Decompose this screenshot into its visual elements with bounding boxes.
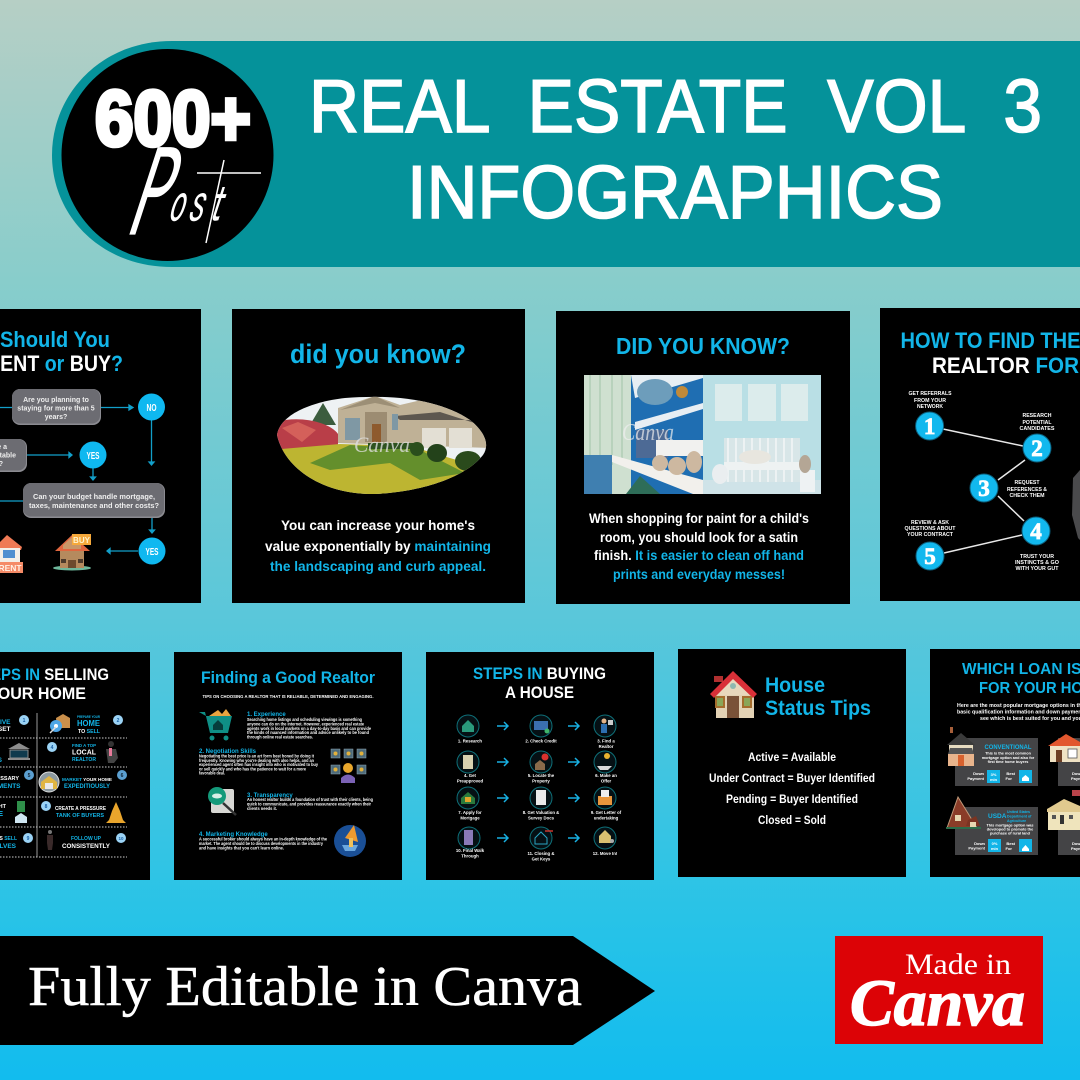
step labels: 12. Move In! <box>593 851 618 856</box>
step 3 <box>970 474 1047 502</box>
decision: yes 2 <box>138 538 166 564</box>
step 1: 1 <box>23 718 26 724</box>
step 2 <box>1020 413 1055 462</box>
icon: house <box>710 671 757 718</box>
card: usda: Down <box>974 841 986 846</box>
step labels: 5. Locate the <box>528 773 555 778</box>
photo: children's room: Canva <box>622 420 674 446</box>
step 2: HOME <box>77 719 101 728</box>
body text: When shopping for paint for a child's <box>589 511 809 526</box>
step 3: REFERENCES & <box>1007 487 1047 493</box>
badge: 600+ Post: ost <box>163 175 239 230</box>
step labels: 1. Research <box>458 738 482 744</box>
step 9 <box>0 833 33 850</box>
card: usda: Agriculture <box>1007 819 1026 823</box>
step 8 <box>41 801 126 823</box>
tip 2: Negotiating the best price is an art form best honed by doing it <box>199 754 315 759</box>
step 5: YOUR CONTRACT <box>907 532 954 538</box>
step 3 <box>0 743 30 764</box>
step labels: 6. Make an <box>595 773 617 778</box>
step 4: 4 <box>51 745 54 751</box>
icon: person silhouette <box>1072 470 1080 540</box>
heading: Finding a Good Realtor <box>201 668 375 687</box>
step 4: FIND A TOP <box>72 743 96 748</box>
icon: rated agent <box>331 749 366 783</box>
callout: fully editable in canva <box>0 936 655 1045</box>
question bubble 2 <box>0 439 27 472</box>
step 1: NETWORK <box>917 404 943 410</box>
heading <box>900 328 1080 378</box>
heading <box>0 665 109 703</box>
tip 2: 2. Negotiation Skills <box>199 749 257 755</box>
panel: finding a good realtor <box>174 652 402 880</box>
step 3: CHECK THEM <box>1010 493 1045 499</box>
panel: did you know (curb appeal) <box>232 309 525 603</box>
step labels: undertaking <box>594 816 619 820</box>
step 10 <box>47 830 126 850</box>
step 6: MARKET YOUR HOME <box>62 777 112 782</box>
badge: made in canva: Made in <box>905 948 1011 981</box>
step 2 <box>50 714 123 735</box>
body text <box>265 517 491 574</box>
heading: DID YOU KNOW? <box>616 333 790 359</box>
step 4: INSTINCTS & GO <box>1015 560 1060 566</box>
step 9: 9 <box>27 836 30 842</box>
title: INFOGRAPHICS <box>407 150 943 234</box>
step 2: PREPARE YOUR <box>77 715 100 719</box>
step labels: Offer <box>601 778 611 784</box>
card: usda: Department of <box>1007 814 1032 818</box>
step 8: CREATE A PRESSURE <box>55 806 107 812</box>
photo: house and lawn: Canva <box>354 432 410 457</box>
tip 3: 3. Transparency <box>247 793 293 799</box>
tip 4: market. The agent should be to discuss developments in the industry <box>199 841 324 846</box>
tip 2: favorable deal. <box>199 770 225 776</box>
step 1: 1 <box>924 414 935 439</box>
icon grid circles <box>457 715 616 849</box>
body text: finish. It is easier to clean off hand <box>594 548 804 563</box>
badge: 600+ Post <box>62 49 274 261</box>
heading: STEPS IN BUYING <box>473 664 606 683</box>
card: usda: Payment <box>968 846 986 850</box>
icon: shopping cart <box>199 709 232 740</box>
connector lines <box>943 429 1025 553</box>
step labels: Get Keys <box>532 856 551 862</box>
step labels: Preapproved <box>457 778 484 784</box>
heading <box>765 674 871 720</box>
tip 1: through online real estate searches. <box>247 734 313 740</box>
heading <box>473 664 606 702</box>
decision: no <box>138 394 165 420</box>
tip 4: A successful broker should always have an in-depth knowledge of the <box>199 836 328 842</box>
tip 1: agents work in local markets on a day-to-day basis and can provide <box>247 726 372 731</box>
step 5 <box>904 520 956 570</box>
step 6 <box>39 770 127 792</box>
step labels: Property <box>532 778 550 784</box>
card: second column top <box>1048 734 1080 786</box>
card: usda: Best <box>1006 841 1016 846</box>
badge: 600+ Post: P <box>117 131 195 256</box>
step 4 <box>1015 517 1060 572</box>
panel: which loan is best <box>930 649 1080 877</box>
card: conventional: Down <box>973 771 985 776</box>
body text: You can increase your home's <box>281 517 475 533</box>
step 10: CONSISTENTLY <box>62 844 110 850</box>
tip 1: Searching home listings and scheduling viewings is something <box>247 717 362 722</box>
card: usda: 0% <box>992 841 998 846</box>
body text: the landscaping and curb appeal. <box>270 558 486 574</box>
step 4: TRUST YOUR <box>1020 554 1054 560</box>
step labels: 11. Closing & <box>528 851 554 856</box>
card: conventional: 3% <box>991 772 997 777</box>
heading: did you know? <box>290 339 466 369</box>
step 2: RESEARCH <box>1022 413 1052 419</box>
panel: rent or buy flowchart <box>0 309 201 603</box>
step 2: TO SELL <box>78 729 101 735</box>
step 1: GET REFERRALS <box>908 391 952 397</box>
decision: yes 2: YES <box>146 547 159 558</box>
tip 3: quick to communicate, and provides reassurance exactly when their <box>247 802 371 806</box>
tip 2 <box>199 749 319 776</box>
badge: made in canva: Canva <box>850 967 1025 1040</box>
step 1 <box>908 391 952 440</box>
card: conventional: This is the most common <box>985 752 1032 756</box>
heading: House <box>765 674 825 697</box>
card: second column bottom <box>1047 790 1080 855</box>
card: usda: min <box>991 846 999 851</box>
body text: room, you should look for a satin <box>600 530 798 545</box>
step 2: POTENTIAL <box>1022 420 1052 426</box>
step 5: 5 <box>924 544 936 569</box>
card: usda: United States <box>1007 810 1030 814</box>
decision: yes <box>80 442 106 468</box>
tip 3: An honest realtor builds a foundation of trust with their clients, being <box>247 797 373 802</box>
step labels: Through <box>461 854 479 858</box>
tip 3: clients needs it. <box>247 806 277 811</box>
step 5: REVIEW & ASK <box>911 520 949 526</box>
question bubble 1: Are you planning to <box>23 397 89 404</box>
panel: how to find the best realtor <box>880 308 1080 601</box>
tip 4 <box>199 832 328 850</box>
arrows <box>497 722 579 842</box>
step 4: LOCAL <box>72 748 96 756</box>
badge: made in canva <box>835 936 1043 1044</box>
tip 4: and have insights that you can't learn online. <box>199 846 284 850</box>
card: conventional: Best <box>1006 771 1016 776</box>
card: conventional: For <box>1006 776 1012 781</box>
card: conventional: min <box>990 777 998 782</box>
status list: Active = Available <box>748 752 836 764</box>
card: usda: developed to promote the <box>987 828 1033 832</box>
subtitle: TIPS ON CHOOSING A REALTOR THAT IS RELIABLE, DETERMINED AND ENGAGING. <box>202 694 374 699</box>
question bubble 3 <box>23 483 165 518</box>
card: usda: For <box>1006 846 1012 851</box>
step labels: 4. Get <box>464 773 477 778</box>
card: conventional: mortgage option and also for <box>982 756 1035 760</box>
step 10: FOLLOW UP <box>71 836 102 842</box>
step labels: 3. Find a <box>597 738 615 744</box>
step labels: 8. Get Valuation & <box>523 810 559 815</box>
card: conventional: first time home buyers <box>988 760 1028 764</box>
card: usda: purchase of rural land <box>990 832 1031 836</box>
card: conventional <box>955 738 1038 786</box>
photo: house and lawn <box>277 396 486 494</box>
decision: yes: YES <box>86 451 100 462</box>
panel: steps in buying a house <box>426 652 654 880</box>
header banner <box>52 41 1080 267</box>
card: usda: USDA <box>988 813 1007 820</box>
step labels: Survey Docs <box>528 816 555 820</box>
icon: magnifier on document <box>208 787 236 815</box>
step icons <box>461 718 614 845</box>
status list: Under Contract = Buyer Identified <box>709 773 875 785</box>
body text: prints and everyday messes! <box>613 567 785 582</box>
heading: A HOUSE <box>505 683 574 702</box>
step 3: REQUEST <box>1014 480 1040 486</box>
step 4: 4 <box>1030 519 1042 544</box>
heading: Status Tips <box>765 697 871 720</box>
photo: children's room <box>584 375 821 494</box>
icon: buy house <box>53 534 91 570</box>
tip 2: frequently. Knowing who you're dealing with also helps, and an <box>199 758 314 763</box>
step labels: 10. Final Walk <box>456 848 485 853</box>
step 8: 8 <box>45 804 48 810</box>
question bubble 3: Can your budget handle mortgage, <box>33 492 155 501</box>
heading: should you rent or buy: Should You <box>0 327 110 352</box>
step 7 <box>0 801 27 823</box>
body text: value exponentially by maintaining <box>265 538 491 554</box>
step 4: WITH YOUR GUT <box>1016 566 1059 572</box>
step 5 <box>0 770 34 790</box>
badge: 600+ Post: 600+ <box>95 74 251 162</box>
step 1 <box>0 715 29 733</box>
step labels: Realtor <box>599 744 614 749</box>
icon: rent house <box>0 535 23 573</box>
tip 1 <box>247 712 372 740</box>
card: usda: This mortgage option was <box>986 824 1034 828</box>
icon: conventional house <box>947 727 975 766</box>
step 8: TANK OF BUYERS <box>56 813 104 819</box>
step 2: CANDIDATES <box>1020 426 1055 432</box>
step 10: 10 <box>118 836 124 841</box>
tip 2: experienced agent often has insight into who is motivated to buy <box>199 762 319 767</box>
step 1: FROM YOUR <box>914 398 946 404</box>
title <box>309 64 1042 234</box>
icon: buy house: BUY <box>73 536 91 545</box>
decision: no: NO <box>146 403 157 414</box>
step labels: 2. Check Credit <box>525 738 557 744</box>
step 4: REALTOR <box>72 757 96 763</box>
icon: a-frame cabin <box>946 797 981 829</box>
card: conventional: CONVENTIONAL <box>984 745 1032 751</box>
step 2: 2 <box>1031 436 1043 461</box>
question bubble 1 <box>12 389 101 425</box>
flowchart connectors <box>0 405 154 554</box>
step labels <box>456 738 622 862</box>
step 6: 6 <box>121 773 124 779</box>
tip 1: 1. Experience <box>247 712 286 718</box>
callout: fully editable in canva: Fully Editable in Canva <box>28 956 582 1018</box>
tip 4: 4. Marketing Knowledge <box>199 832 268 838</box>
step labels: Mortgage <box>460 816 480 820</box>
panel: did you know (paint) <box>556 311 850 604</box>
body text <box>589 511 809 582</box>
step 4 <box>47 741 118 763</box>
tip 3 <box>247 793 373 811</box>
step 5: QUESTIONS ABOUT <box>904 526 956 532</box>
intro text <box>957 703 1080 722</box>
step 2: 2 <box>117 718 120 724</box>
question bubble 1: staying for more than 5 <box>17 406 95 412</box>
step labels: 7. Apply for <box>458 810 482 815</box>
status list: Closed = Sold <box>758 815 826 827</box>
panel: steps in selling your home <box>0 652 150 880</box>
heading: should you rent or buy <box>0 327 123 376</box>
title: REAL ESTATE VOL 3 <box>309 64 1042 148</box>
step 3: 3 <box>978 476 990 501</box>
step 5: 5 <box>28 773 31 779</box>
question bubble 1: years? <box>45 414 67 421</box>
tip 1: the kinds of nuanced information and advice unlikely to be found <box>247 730 369 735</box>
panel: house status tips <box>678 649 906 877</box>
tip 2: or sell quickly and who has the patience to wait for a more <box>199 766 307 772</box>
question bubble 3: taxes, maintenance and other costs? <box>29 501 159 510</box>
card: conventional: Payment <box>967 776 985 781</box>
icon: megaphone badge <box>334 825 366 857</box>
heading <box>962 661 1080 697</box>
tip 1: anyone can do on the internet. However, experienced real estate <box>247 722 365 726</box>
step labels: 9. Get Letter of <box>591 810 622 815</box>
step 6: EXPEDITIOUSLY <box>64 784 110 790</box>
card: usda <box>955 807 1038 855</box>
status list: Pending = Buyer Identified <box>726 794 858 806</box>
status list <box>709 752 875 827</box>
